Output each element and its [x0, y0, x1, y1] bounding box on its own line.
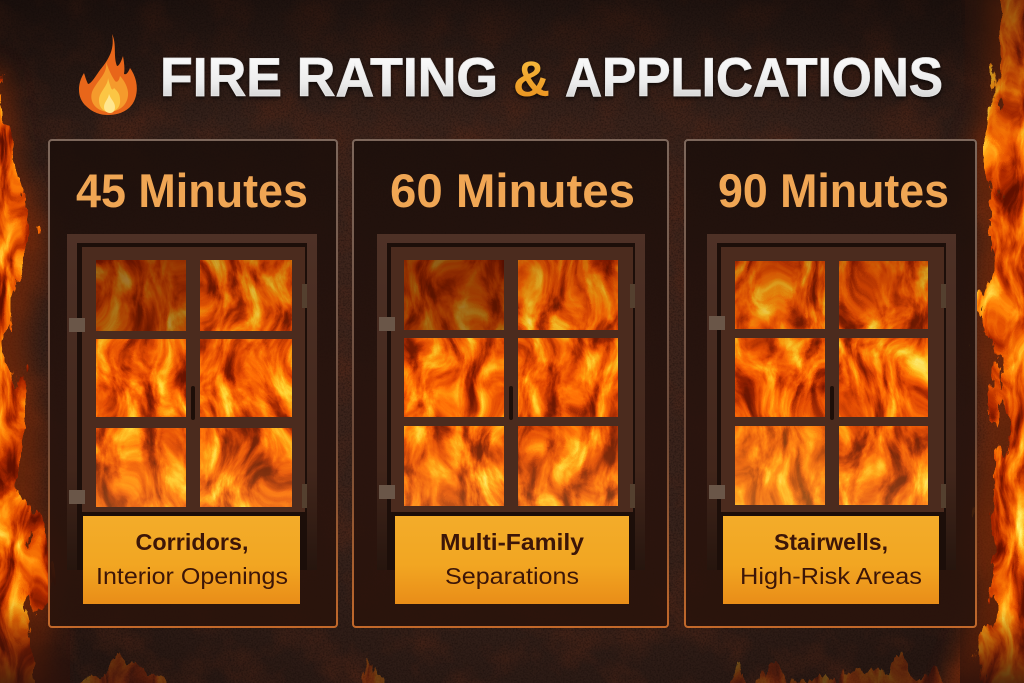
flames: bottom edge embers [70, 660, 970, 683]
label: multi-family: Separations [445, 563, 579, 589]
heading: 90 minutes: 90 Minutes [718, 164, 949, 217]
panel: 90 minutes [685, 140, 976, 627]
flames: left edge [0, 60, 70, 683]
label: multi-family: Multi-Family [440, 529, 584, 555]
panel: 45 minutes [49, 140, 337, 627]
flames: right edge [940, 0, 1024, 683]
window: 60 minutes [377, 234, 645, 570]
label: stairwells: Stairwells, [774, 529, 888, 555]
window: 90 minutes [707, 234, 956, 570]
title: APPLICATIONS [565, 46, 943, 108]
label: corridors: Interior Openings [96, 563, 288, 589]
heading: 45 minutes: 45 Minutes [76, 164, 308, 217]
label: stairwells: High-Risk Areas [740, 563, 922, 589]
label: stairwells [723, 516, 939, 604]
window: 45 minutes [67, 234, 317, 570]
title [160, 46, 943, 108]
label: corridors [83, 516, 300, 604]
title: FIRE RATING [160, 46, 498, 108]
heading: 60 minutes: 60 Minutes [390, 164, 635, 217]
title: & [513, 51, 550, 107]
panel: 60 minutes [353, 140, 668, 627]
label: corridors: Corridors, [136, 529, 248, 555]
label: multi-family [395, 516, 629, 604]
icon: flame [79, 34, 137, 115]
